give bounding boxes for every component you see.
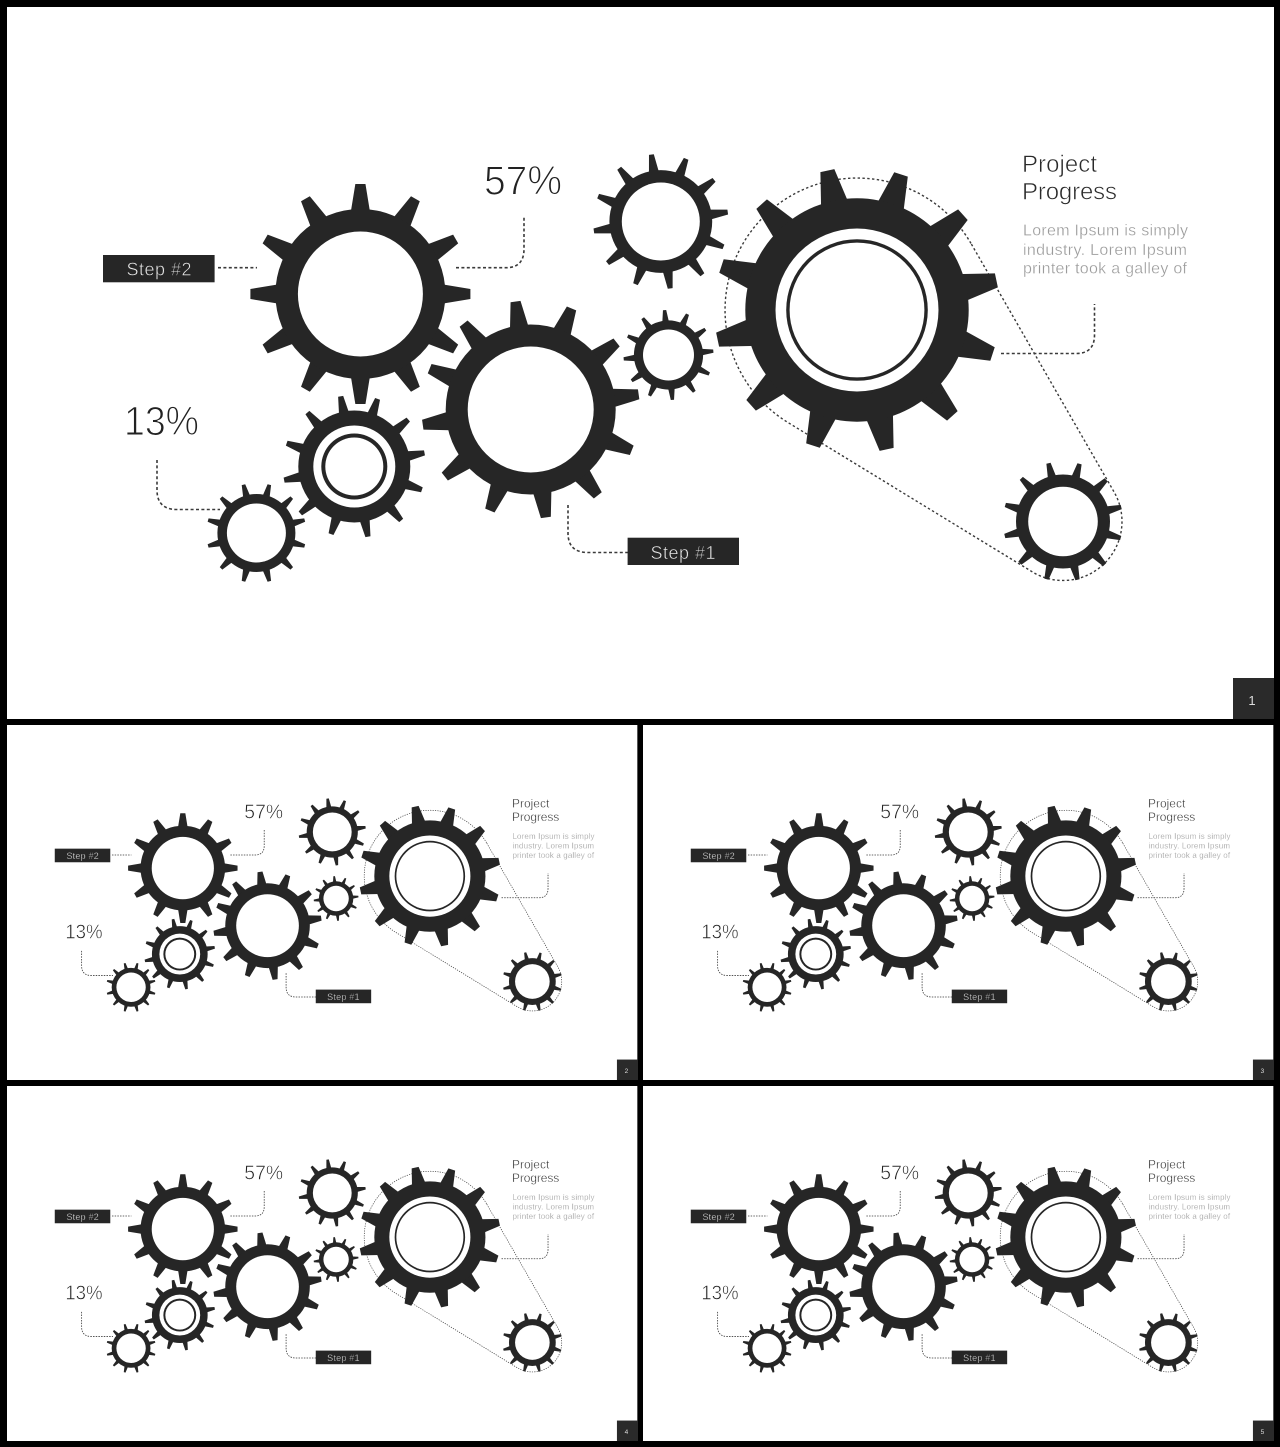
panel: thumbnail slide 4: Step #2 bbox=[66, 1212, 99, 1222]
stat: 57%: 57% bbox=[484, 158, 562, 204]
panel: thumbnail slide 3: Step #2 bbox=[702, 851, 735, 861]
panel: thumbnail slide 5 bbox=[643, 1086, 1273, 1441]
gears artwork, slide 4 bbox=[55, 1148, 637, 1441]
panel: thumbnail slide 3 bbox=[643, 725, 1273, 1080]
panel: thumbnail slide 3: industry. Lorem Ipsum bbox=[1148, 842, 1230, 851]
panel: thumbnail slide 5: industry. Lorem Ipsum bbox=[1148, 1203, 1230, 1212]
body text: printer took a galley of bbox=[1023, 260, 1188, 278]
panel: thumbnail slide 4: Progress bbox=[512, 1171, 559, 1185]
panel: thumbnail slide 3: printer took a galley of bbox=[1148, 851, 1231, 860]
panel: thumbnail slide 2 bbox=[7, 725, 637, 1080]
gears artwork, slide 5 bbox=[691, 1148, 1273, 1441]
panel: thumbnail slide 3: Project bbox=[1148, 796, 1186, 810]
heading: Project Progress bbox=[1022, 151, 1117, 206]
panel: thumbnail slide 2: Project bbox=[512, 796, 550, 810]
label: Step #1: Step #1 bbox=[650, 543, 716, 563]
panel: thumbnail slide 4 bbox=[7, 1086, 637, 1441]
panel: thumbnail slide 4: industry. Lorem Ipsum bbox=[512, 1203, 594, 1212]
panel: thumbnail slide 4: Step #1 bbox=[327, 1353, 359, 1363]
heading: Project Progress: Project bbox=[1022, 151, 1097, 178]
panel: thumbnail slide 5: 57% bbox=[880, 1162, 919, 1184]
gears artwork, slide 2 bbox=[55, 787, 637, 1080]
panel: thumbnail slide 3: Step #1 bbox=[963, 992, 995, 1002]
panel: thumbnail slide 4: printer took a galley of bbox=[512, 1212, 595, 1221]
gears, belt and connector artwork bbox=[103, 130, 1274, 719]
panel: thumbnail slide 2: 2 bbox=[625, 1068, 629, 1075]
body text: industry. Lorem Ipsum bbox=[1023, 242, 1187, 259]
body text: Lorem Ipsum is simply bbox=[1023, 222, 1188, 240]
panel: thumbnail slide 5: Step #2 bbox=[702, 1212, 735, 1222]
panel: thumbnail slide 5: printer took a galley of bbox=[1148, 1212, 1231, 1221]
panel: thumbnail slide 2: printer took a galley of bbox=[512, 851, 595, 860]
panel: thumbnail slide 5: Step #1 bbox=[963, 1353, 995, 1363]
panel: thumbnail slide 4: Lorem Ipsum is simply bbox=[512, 1193, 595, 1202]
panel: thumbnail slide 3: 3 bbox=[1261, 1068, 1265, 1075]
panel: thumbnail slide 2: Step #1 bbox=[327, 992, 359, 1002]
heading: Project Progress: Progress bbox=[1022, 178, 1117, 206]
panel: thumbnail slide 2: Progress bbox=[512, 810, 559, 824]
panel: thumbnail slide 2: Lorem Ipsum is simply bbox=[512, 832, 595, 841]
panel: thumbnail slide 3: 13% bbox=[701, 921, 739, 943]
panel: thumbnail slide 4: 4 bbox=[625, 1429, 629, 1436]
panel: thumbnail slide 5: 5 bbox=[1261, 1429, 1265, 1436]
panel: thumbnail slide 4: 57% bbox=[244, 1162, 283, 1184]
panel: thumbnail slide 2: 13% bbox=[65, 921, 103, 943]
label: Step #2: Step #2 bbox=[126, 260, 192, 280]
page number: 1 bbox=[1248, 693, 1256, 708]
panel: thumbnail slide 5: Progress bbox=[1148, 1171, 1195, 1185]
panel: thumbnail slide 2: 57% bbox=[244, 801, 283, 823]
panel: thumbnail slide 5: Lorem Ipsum is simply bbox=[1148, 1193, 1231, 1202]
body text bbox=[1023, 222, 1188, 278]
panel: thumbnail slide 3: 57% bbox=[880, 801, 919, 823]
panel: main slide bbox=[7, 7, 1274, 719]
panel: thumbnail slide 5: 13% bbox=[701, 1282, 739, 1304]
panel: thumbnail slide 4: 13% bbox=[65, 1282, 103, 1304]
panel: thumbnail slide 4: Project bbox=[512, 1157, 550, 1171]
panel: thumbnail slide 2: industry. Lorem Ipsum bbox=[512, 842, 594, 851]
panel: thumbnail slide 3: Progress bbox=[1148, 810, 1195, 824]
panel: thumbnail slide 3: Lorem Ipsum is simply bbox=[1148, 832, 1231, 841]
gears artwork, slide 3 bbox=[691, 787, 1273, 1080]
stat: 13%: 13% bbox=[124, 398, 199, 444]
panel: thumbnail slide 2: Step #2 bbox=[66, 851, 99, 861]
panel: thumbnail slide 5: Project bbox=[1148, 1157, 1186, 1171]
